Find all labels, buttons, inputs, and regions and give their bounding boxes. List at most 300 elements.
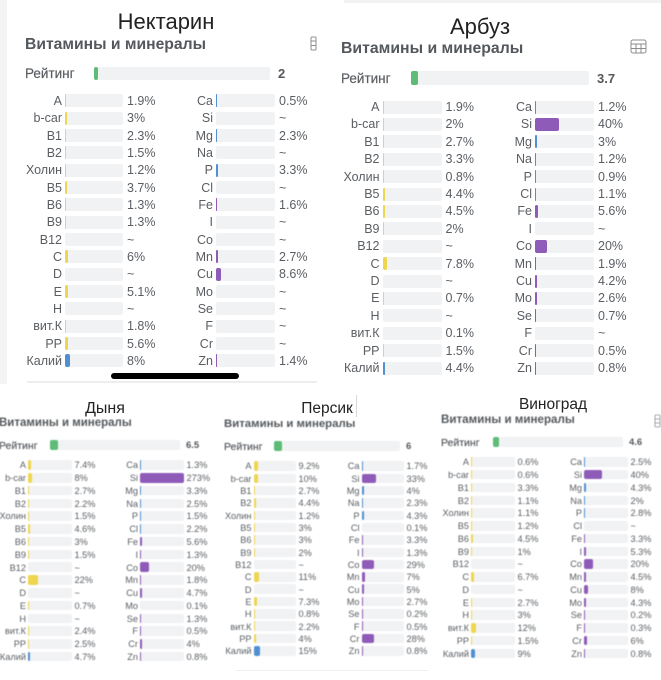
panel: Дыня: ~ — [74, 563, 80, 573]
panel: Виноград: Cl — [573, 521, 582, 531]
rating value: 3.7 — [597, 71, 615, 86]
panel: Дыня: 8% — [74, 473, 88, 483]
panel: Дыня: A — [20, 460, 26, 470]
panel: Персик: P — [353, 511, 360, 521]
panel: Персик: вит.К — [230, 622, 252, 632]
panel: Персик: 28% — [406, 634, 425, 644]
panel: Дыня: 4.6% — [74, 524, 95, 534]
rating label: Рейтинг — [0, 440, 38, 452]
panel: Дыня: 273% — [186, 473, 210, 483]
rating bar — [493, 437, 623, 447]
panel: Арбуз: 20% — [598, 239, 623, 253]
panel: Нектарин: вит.К — [33, 319, 62, 333]
heading: Витамины и минералы — [25, 36, 206, 52]
panel: Арбуз: 1.9% — [446, 100, 474, 114]
panel: Нектарин: Mn — [196, 250, 213, 264]
title: Нектарин — [118, 9, 214, 34]
panel: Дыня: 2.5% — [74, 639, 95, 649]
rating label: Рейтинг — [441, 437, 480, 449]
panel: Дыня: Mn — [125, 575, 138, 585]
home indicator bar — [111, 373, 239, 379]
panel: Виноград: D — [462, 585, 469, 595]
panel: Арбуз: 4.5% — [446, 204, 474, 218]
panel: Арбуз: Se — [517, 309, 532, 323]
panel: Дыня: 20% — [186, 563, 205, 573]
panel: Персик: PP — [239, 634, 252, 644]
panel: Персик: 33% — [406, 474, 425, 484]
panel: Персик: 0.8% — [298, 609, 319, 619]
rating value: 6.5 — [186, 440, 199, 451]
panel: Арбуз — [341, 14, 646, 375]
rating row — [341, 71, 615, 86]
panel: Виноград: вит.К — [448, 623, 469, 633]
panel: Арбуз: ~ — [446, 309, 453, 323]
panel: Арбуз: H — [370, 309, 380, 323]
panel: Арбуз: Fe — [517, 204, 532, 218]
panel: Нектарин: Se — [198, 302, 213, 316]
panel: Персик: 15% — [298, 646, 317, 656]
chart: minerals — [569, 456, 652, 659]
panel: Дыня: P — [132, 511, 138, 521]
panel: Виноград: 2.7% — [518, 598, 538, 608]
panel: Дыня: 1.3% — [186, 550, 207, 560]
panel: Виноград: B6 — [458, 534, 469, 544]
panel: Персик: B6 — [240, 535, 252, 545]
panel: Арбуз: 0.7% — [446, 291, 474, 305]
panel: Нектарин: ~ — [279, 111, 286, 125]
panel: Персик: 9.2% — [298, 461, 319, 471]
panel: Виноград: I — [579, 547, 582, 557]
panel: Арбуз: F — [524, 326, 532, 340]
panel: Дыня: b-car — [5, 473, 26, 483]
panel: Нектарин: 2.7% — [279, 250, 308, 264]
panel: Виноград: 8% — [630, 585, 644, 595]
chart: minerals — [125, 460, 210, 662]
panel: Арбуз: Zn — [517, 361, 532, 375]
panel: Арбуз: 2.6% — [598, 291, 626, 305]
panel: Нектарин: 3.3% — [279, 163, 308, 177]
panel: Виноград: Mg — [569, 483, 582, 493]
panel: Виноград: B12 — [453, 559, 469, 569]
chart: vitamins — [0, 459, 96, 662]
panel: Арбуз: ~ — [598, 222, 605, 236]
panel: Дыня: B6 — [15, 537, 26, 547]
panel: Арбуз: 1.2% — [598, 152, 626, 166]
panel: Нектарин: A — [54, 94, 62, 108]
panel: Персик: 1.7% — [406, 461, 427, 471]
panel: Нектарин: b-car — [34, 111, 62, 125]
panel: Нектарин: 1.3% — [127, 198, 156, 212]
panel: Арбуз: Cl — [520, 187, 532, 201]
panel: Персик: E — [245, 597, 252, 607]
panel: Виноград: 4.3% — [630, 598, 651, 608]
panel: Арбуз: B5 — [364, 187, 380, 201]
panel: Нектарин: Cl — [201, 181, 213, 195]
panel: Нектарин: Cr — [200, 337, 213, 351]
panel: Виноград: A — [463, 457, 469, 467]
panel: Нектарин: Холин — [26, 163, 62, 177]
icon: table — [310, 36, 316, 50]
chart: vitamins — [442, 456, 539, 659]
panel: Персик: 29% — [406, 560, 425, 570]
panel: Виноград: 9% — [518, 649, 531, 659]
panel: Персик: 10% — [298, 474, 317, 484]
panel: Дыня: ~ — [74, 588, 80, 598]
panel: Нектарин: Mo — [196, 285, 213, 299]
panel: Персик: Mo — [347, 597, 360, 607]
panel: Дыня: Mo — [125, 601, 138, 611]
panel: Нектарин: ~ — [279, 302, 286, 316]
panel: Нектарин: ~ — [279, 233, 286, 247]
panel: Нектарин: Si — [202, 111, 213, 125]
rating row — [224, 440, 412, 453]
panel: Арбуз: I — [529, 222, 532, 236]
panel: Арбуз: 0.5% — [598, 344, 626, 358]
panel: Дыня: 2.4% — [74, 626, 95, 636]
panel: Нектарин: 5.6% — [127, 337, 156, 351]
panel: Дыня: Fe — [127, 537, 138, 547]
panel: Дыня: 2.5% — [186, 499, 207, 509]
panel: Нектарин: ~ — [279, 181, 286, 195]
panel: Персик: 3.3% — [406, 535, 427, 545]
panel: Дыня: B5 — [15, 524, 26, 534]
panel: Виноград: PP — [457, 636, 469, 646]
panel: Персик: 0.1% — [406, 523, 427, 533]
panel: Дыня: 3% — [74, 537, 88, 547]
panel: Нектарин: ~ — [279, 337, 286, 351]
panel: Виноград: 0.2% — [630, 610, 651, 620]
panel: Арбуз: 5.6% — [598, 204, 626, 218]
panel: Арбуз: 7.8% — [446, 257, 474, 271]
panel: Виноград: 2.5% — [630, 457, 651, 467]
panel: Персик: Co — [348, 560, 360, 570]
panel: Арбуз: Mo — [515, 291, 532, 305]
panel: Персик: 0.2% — [406, 609, 427, 619]
panel: Нектарин: ~ — [127, 233, 134, 247]
panel: Арбуз: C — [370, 257, 380, 271]
panel: Персик: Холин — [225, 511, 252, 521]
panel: Персик: Mg — [347, 486, 360, 496]
panel: Виноград: ~ — [518, 585, 523, 595]
panel: Нектарин: Na — [197, 146, 213, 160]
panel: Дыня: Калий — [0, 652, 26, 662]
chart: minerals — [515, 100, 626, 375]
panel: Нектарин: Калий — [26, 354, 62, 368]
panel: Персик: 3% — [298, 535, 312, 545]
panel: Нектарин: B1 — [47, 129, 62, 143]
panel: Нектарин: Fe — [198, 198, 213, 212]
panel: Персик: 0.5% — [406, 622, 427, 632]
panel: Персик: 7% — [406, 572, 420, 582]
panel: Нектарин: ~ — [127, 267, 134, 281]
panel: Виноград: Na — [570, 496, 582, 506]
panel: Арбуз: 3% — [598, 135, 616, 149]
panel: Персик: Cl — [351, 523, 360, 533]
panel: Виноград: E — [463, 598, 469, 608]
panel: Арбуз: 0.8% — [598, 361, 626, 375]
rating label: Рейтинг — [224, 441, 263, 453]
panel: Персик: B1 — [240, 486, 252, 496]
panel: Нектарин: ~ — [279, 146, 286, 160]
panel: Дыня: Zn — [127, 652, 138, 662]
panel: Нектарин: 2.3% — [127, 129, 156, 143]
panel: Нектарин: 1.5% — [127, 146, 156, 160]
heading: Витамины и минералы — [441, 413, 575, 426]
panel: Виноград: Si — [574, 470, 582, 480]
panel: Дыня: 0.5% — [186, 626, 207, 636]
panel: Нектарин: 1.4% — [279, 354, 308, 368]
panel: Нектарин: 6% — [127, 250, 145, 264]
panel: Персик: Na — [348, 498, 360, 508]
panel: Арбуз: ~ — [446, 274, 453, 288]
panel: Виноград: ~ — [518, 559, 523, 569]
chart: vitamins — [224, 460, 320, 657]
panel: Арбуз: PP — [363, 344, 380, 358]
panel: Дыня: B12 — [10, 563, 26, 573]
panel: Персик: 4% — [298, 634, 312, 644]
panel: Нектарин: 1.2% — [127, 163, 156, 177]
panel: Дыня: I — [135, 550, 138, 560]
rating row — [25, 66, 285, 81]
panel: Нектарин: B2 — [47, 146, 62, 160]
panel: Арбуз: 4.4% — [446, 361, 474, 375]
panel: Нектарин: P — [205, 163, 213, 177]
heading: Витамины и минералы — [341, 40, 523, 56]
rating bar — [94, 67, 270, 80]
rating row — [0, 439, 200, 452]
panel: Дыня: 2.2% — [74, 499, 95, 509]
panel: Виноград: 3% — [518, 610, 531, 620]
panel: Персик — [224, 400, 428, 657]
panel: Виноград: Cu — [570, 585, 582, 595]
panel: Виноград — [441, 396, 661, 659]
panel: Персик: H — [245, 609, 252, 619]
panel: Персик: B9 — [240, 548, 252, 558]
panel: Дыня: 0.8% — [186, 652, 207, 662]
panel: Нектарин: D — [53, 267, 62, 281]
heading: Витамины и минералы — [0, 416, 132, 428]
panel: Персик: 5% — [406, 585, 420, 595]
panel: Виноград: B9 — [458, 547, 469, 557]
panel: Нектарин: 8% — [127, 354, 145, 368]
panel: Персик: Ca — [348, 461, 360, 471]
panel: Персик: 2% — [298, 548, 312, 558]
panel: Арбуз: P — [524, 170, 532, 184]
panel: Дыня: 0.7% — [74, 601, 95, 611]
panel: Персик: 2.7% — [406, 597, 427, 607]
panel: Арбуз: ~ — [446, 239, 453, 253]
panel: Виноград: C — [462, 572, 469, 582]
panel: Персик: Cu — [348, 585, 360, 595]
panel: Арбуз: Cu — [516, 274, 532, 288]
panel: Арбуз: Si — [521, 117, 532, 131]
panel: Дыня: F — [132, 626, 138, 636]
panel: Дыня: Se — [127, 614, 138, 624]
panel: Арбуз: 2% — [446, 222, 464, 236]
panel: Арбуз: Ca — [516, 100, 532, 114]
panel: Дыня: 5.6% — [186, 537, 207, 547]
panel: Дыня: Ca — [126, 460, 138, 470]
panel: Персик: B12 — [235, 560, 252, 570]
divider under first panel — [27, 381, 317, 383]
panel: Арбуз: 0.8% — [446, 170, 474, 184]
panel: Арбуз: B6 — [364, 204, 380, 218]
panel: Дыня: 1.3% — [186, 460, 207, 470]
panel: Нектарин: Mg — [196, 129, 213, 143]
panel: Нектарин: 3% — [127, 111, 145, 125]
panel: Арбуз: 4.2% — [598, 274, 626, 288]
panel: Арбуз: 1.2% — [598, 100, 626, 114]
panel: Дыня: E — [20, 601, 26, 611]
rating label: Рейтинг — [341, 71, 391, 86]
panel: Дыня: 1.5% — [74, 550, 95, 560]
panel: Нектарин: Cu — [197, 267, 213, 281]
panel: Дыня: 1.5% — [186, 511, 207, 521]
panel: Дыня: вит.К — [5, 626, 26, 636]
panel: Виноград: B2 — [458, 496, 469, 506]
panel: Арбуз: B2 — [364, 152, 380, 166]
panel: Арбуз: 0.9% — [598, 170, 626, 184]
panel: Персик: 0.8% — [406, 646, 427, 656]
panel: Нектарин: Co — [197, 233, 213, 247]
panel: Персик: 1.2% — [298, 511, 319, 521]
chart: vitamins — [343, 100, 474, 375]
rating bar — [274, 441, 400, 451]
panel: Дыня: 4.7% — [186, 588, 207, 598]
panel: Арбуз: B12 — [357, 239, 380, 253]
panel: Виноград: Калий — [443, 649, 469, 659]
panel: Персик: C — [245, 572, 252, 582]
panel: Арбуз: A — [371, 100, 380, 114]
panel: Нектарин: C — [53, 250, 62, 264]
panel: Персик: 2.3% — [406, 498, 427, 508]
panel: Виноград: 20% — [630, 559, 649, 569]
panel: Нектарин: B12 — [40, 233, 62, 247]
panel: Нектарин: PP — [45, 337, 62, 351]
panel: Дыня: H — [19, 614, 26, 624]
panel: Персик: I — [357, 548, 360, 558]
panel: Виноград: ~ — [630, 521, 636, 531]
panel: Виноград: Mo — [569, 598, 582, 608]
panel: Арбуз: Mn — [515, 257, 532, 271]
panel: Виноград: B5 — [458, 521, 469, 531]
panel: Дыня: Si — [130, 473, 138, 483]
panel: Персик: 2.7% — [298, 486, 319, 496]
panel: Дыня: Холин — [0, 511, 26, 521]
panel: Персик: 4.4% — [298, 498, 319, 508]
panel: Дыня: 4.7% — [74, 652, 95, 662]
panel: Виноград: 0.6% — [518, 457, 538, 467]
panel: Персик: Si — [351, 474, 360, 484]
panel: Нектарин: Zn — [198, 354, 213, 368]
panel: Персик: Cr — [350, 634, 360, 644]
rating value: 2 — [278, 66, 285, 81]
panel: Виноград: F — [576, 623, 582, 633]
panel: Дыня — [0, 400, 210, 662]
icon: table — [630, 40, 646, 54]
panel: Нектарин: 1.6% — [279, 198, 308, 212]
panel: Нектарин: F — [205, 319, 213, 333]
panel: Арбуз: 3.3% — [446, 152, 474, 166]
panel: Виноград: 4.5% — [518, 534, 538, 544]
top edge strip — [344, 0, 661, 3]
panel: Арбуз: 2% — [446, 117, 464, 131]
panel: Дыня: B2 — [15, 499, 26, 509]
panel: Персик: b-car — [231, 474, 252, 484]
panel: Нектарин: E — [54, 285, 62, 299]
panel: Виноград: P — [576, 508, 582, 518]
panel: Дыня: Na — [126, 499, 138, 509]
panel: Виноград: 1.5% — [518, 636, 538, 646]
panel: Арбуз: Калий — [344, 361, 380, 375]
panel: Виноград: Холин — [442, 508, 469, 518]
panel: Дыня: 1.5% — [74, 511, 95, 521]
stray line beside Персик title — [356, 395, 357, 417]
panel: Арбуз: Cr — [519, 344, 532, 358]
panel: Нектарин: ~ — [127, 302, 134, 316]
panel: Персик: 7.3% — [298, 597, 319, 607]
panel: Дыня: D — [19, 588, 26, 598]
panel: Виноград: 0.3% — [630, 623, 651, 633]
panel: Арбуз: B1 — [364, 135, 380, 149]
panel: Дыня: 1.3% — [186, 614, 207, 624]
rating label: Рейтинг — [25, 66, 75, 81]
panel: Персик: ~ — [298, 585, 304, 595]
panel: Нектарин: ~ — [279, 285, 286, 299]
panel: Дыня: 22% — [74, 575, 93, 585]
panel: Дыня: B1 — [15, 486, 26, 496]
panel: Арбуз: Холин — [343, 170, 380, 184]
panel: Нектарин: 8.6% — [279, 267, 308, 281]
panel: Виноград: 1.2% — [518, 521, 538, 531]
panel: Дыня: Mg — [125, 486, 138, 496]
panel: Дыня: C — [19, 575, 26, 585]
panel: Виноград: 2% — [630, 496, 644, 506]
panel: Дыня: 2.7% — [74, 486, 95, 496]
panel: Персик: 11% — [298, 572, 316, 582]
panel: Нектарин: 0.5% — [279, 94, 308, 108]
panel: Виноград: 40% — [630, 470, 649, 480]
panel: Нектарин: H — [53, 302, 62, 316]
panel: Виноград: 4.3% — [630, 483, 651, 493]
panel: Нектарин — [25, 9, 316, 368]
panel: Арбуз: Na — [516, 152, 532, 166]
panel: Персик: D — [245, 585, 252, 595]
panel: Дыня: 2.2% — [186, 524, 207, 534]
panel: Арбуз: ~ — [598, 326, 605, 340]
panel: Персик: Калий — [225, 646, 252, 656]
panel: Персик: A — [245, 461, 252, 471]
panel: Виноград: H — [462, 610, 469, 620]
panel: Виноград: Mn — [569, 572, 582, 582]
panel: Арбуз: D — [370, 274, 380, 288]
panel: Виноград: b-car — [448, 470, 469, 480]
panel: Виноград: 0.6% — [518, 470, 538, 480]
panel: Дыня: PP — [14, 639, 26, 649]
panel: Дыня: ~ — [74, 614, 80, 624]
panel: Арбуз: E — [371, 291, 380, 305]
panel: Дыня: Cu — [126, 588, 138, 598]
panel: Арбуз: Co — [516, 239, 532, 253]
rating bar — [411, 71, 589, 85]
panel: Нектарин: 1.3% — [127, 215, 156, 229]
panel: Персик: 2.2% — [298, 622, 319, 632]
panel: Нектарин: I — [210, 215, 213, 229]
panel: Арбуз: 1.5% — [446, 344, 474, 358]
panel: Виноград: B1 — [458, 483, 469, 493]
panel: Дыня: Cl — [129, 524, 138, 534]
panel: Персик: Fe — [349, 535, 360, 545]
